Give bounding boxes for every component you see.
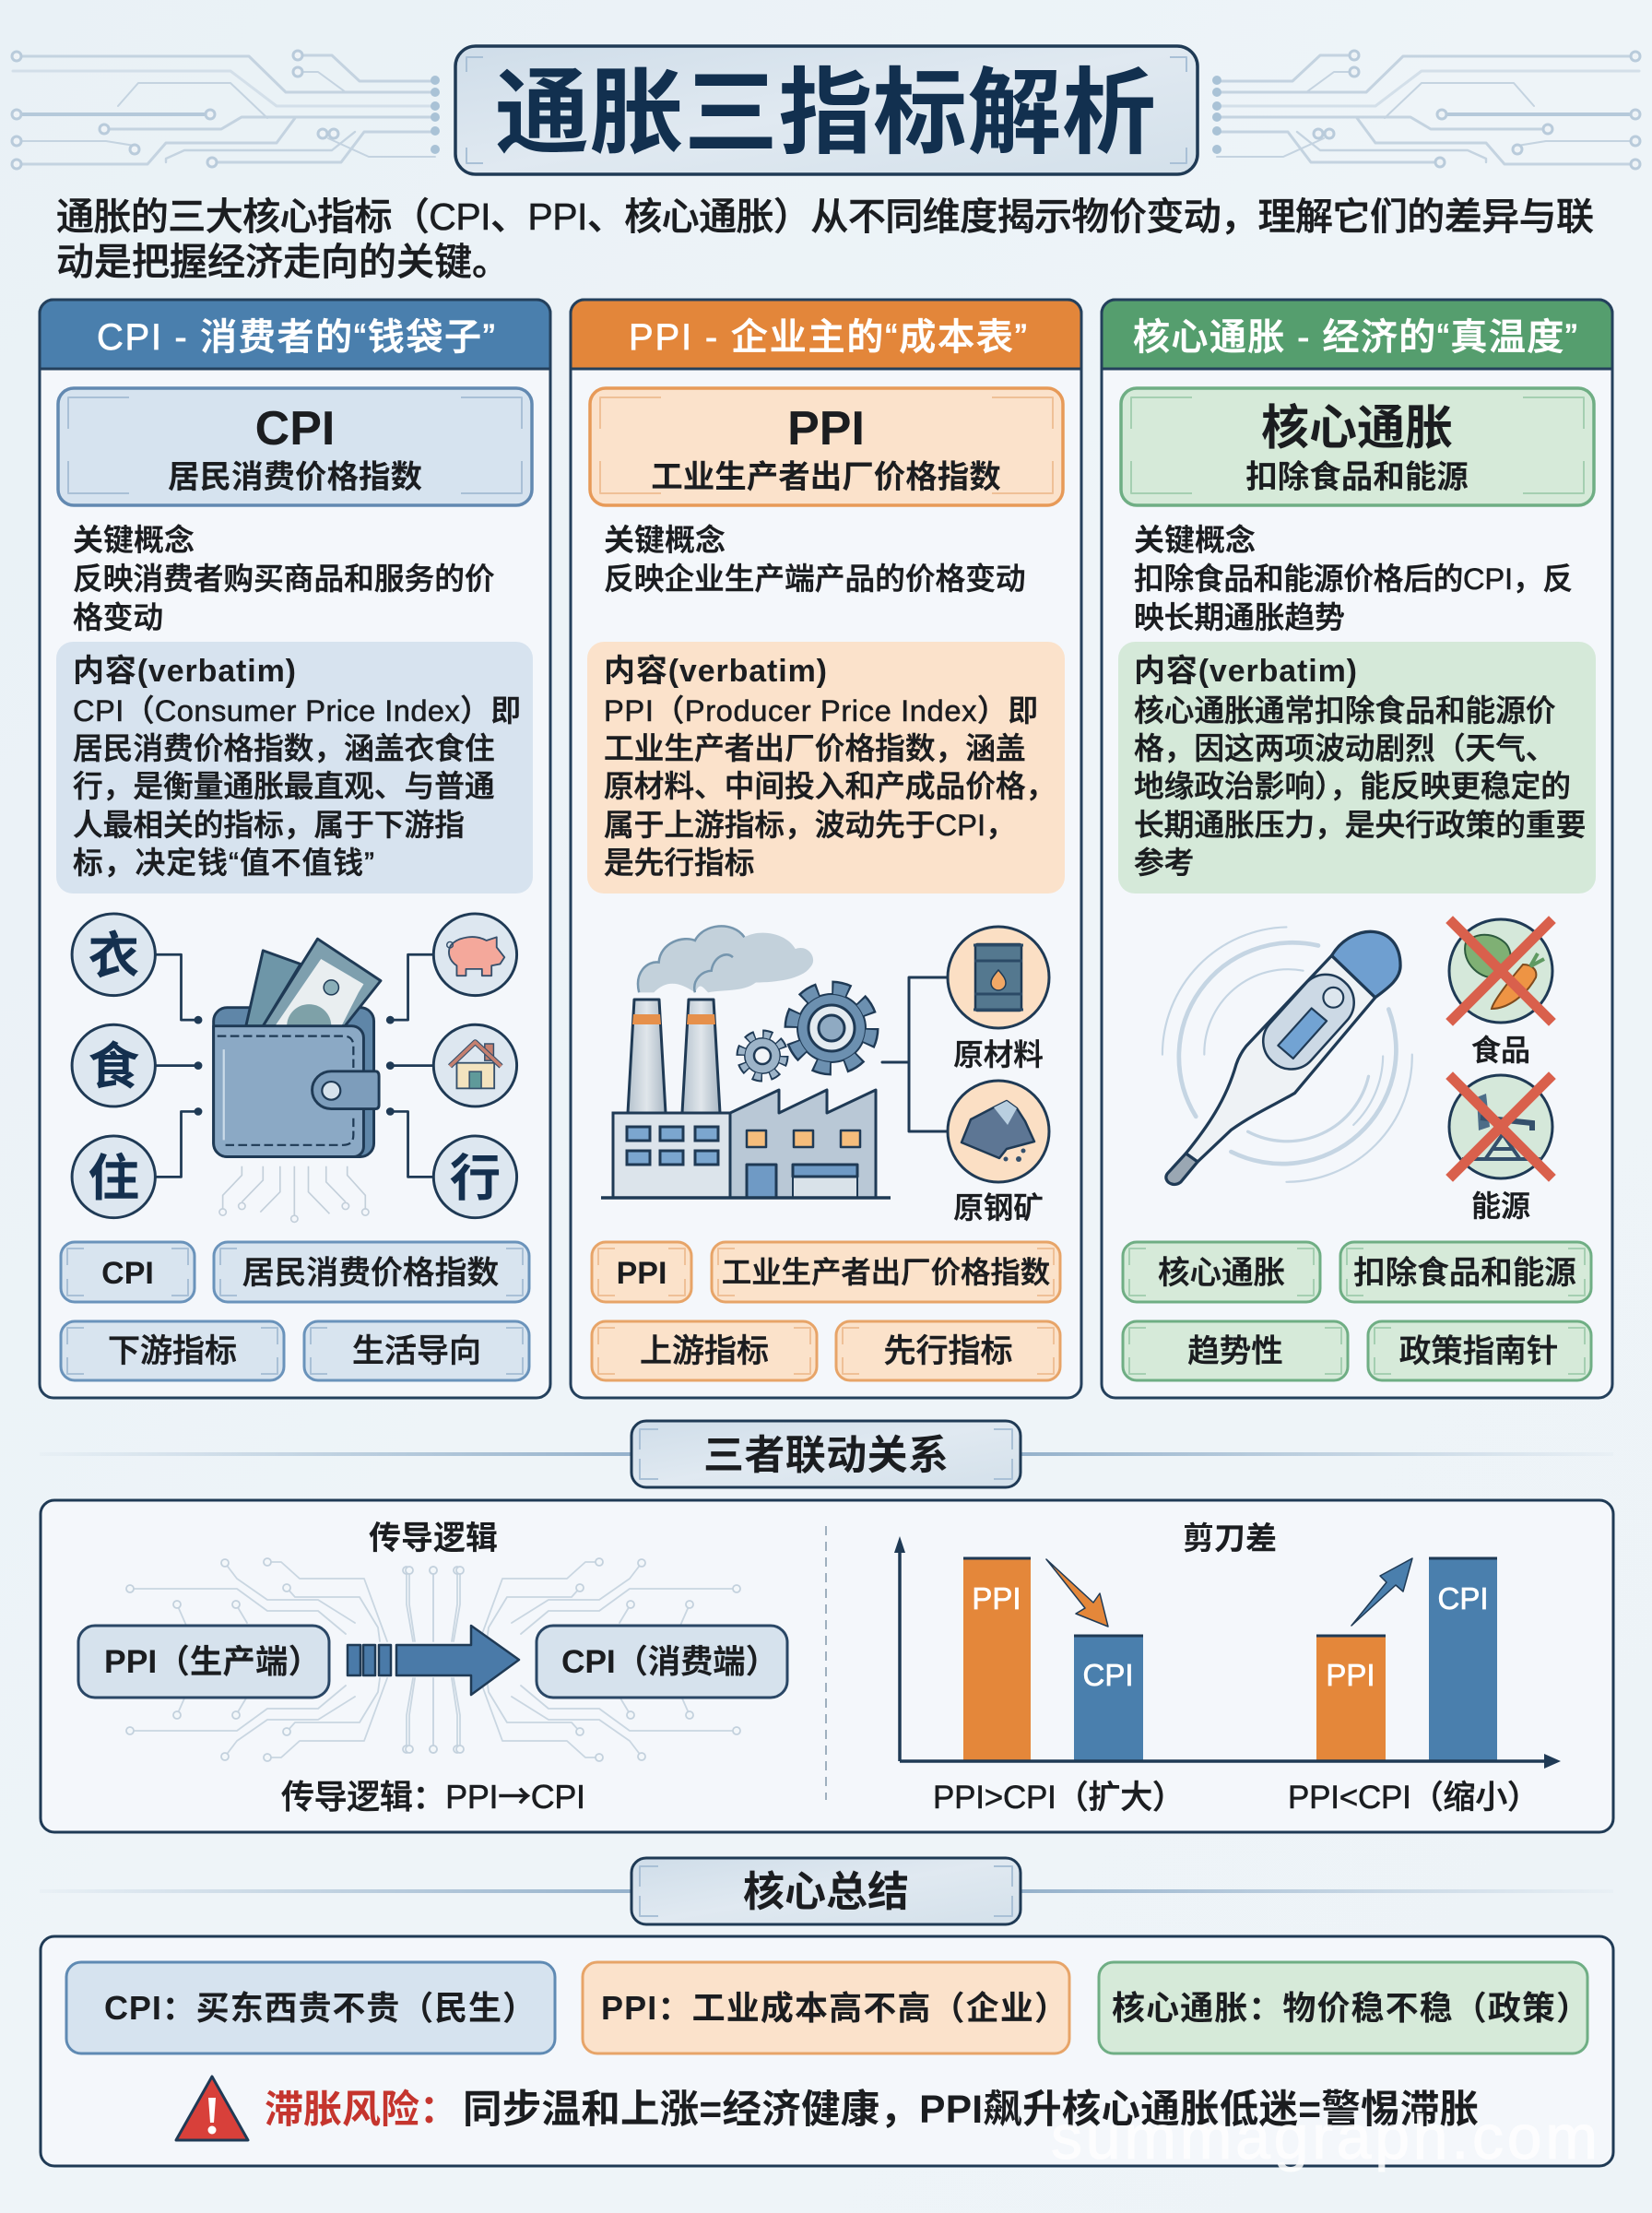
header: PPI: [571, 300, 1081, 369]
tags CPI: [61, 1242, 529, 1380]
CPI name box: [58, 388, 532, 505]
heading: summary: 核心总结: [743, 1868, 909, 1915]
panel: PPI: [571, 300, 1081, 1398]
icon: 行: [433, 1136, 517, 1218]
bar PPI low: PPI: [1326, 1658, 1375, 1692]
heading: summary: [40, 1858, 1613, 1924]
divider: [825, 1526, 827, 1800]
scissors heading: 剪刀差: [1183, 1521, 1277, 1556]
panel: CPI: [40, 300, 550, 1398]
content box core: [1118, 642, 1596, 893]
content box CPI: 内容(verbatim): [73, 654, 296, 689]
label shrink: PPI<CPI（缩小）: [1288, 1780, 1540, 1816]
icon: 衣: 衣: [88, 928, 139, 984]
scissors bar chart: [894, 1536, 1561, 1816]
arrow down: [1046, 1559, 1108, 1627]
heading: linkage: [40, 1421, 1613, 1487]
summary CPI: [66, 1962, 555, 2053]
tags CPI: 居民消费价格指数: [242, 1255, 499, 1291]
tags core: 核心通胀: [1158, 1256, 1285, 1291]
connector: [882, 977, 947, 1131]
key concept CPI: [73, 523, 495, 634]
content box core: 内容(verbatim): [1134, 654, 1357, 689]
content box CPI: CPI（Consumer Price Index）即: [73, 693, 521, 728]
intro text: 通胀的三大核心指标（CPI、PPI、核心通胀）从不同维度揭示物价变动，理解它们的差异与联: [56, 195, 1594, 238]
label expand: PPI>CPI（扩大）: [933, 1780, 1185, 1816]
ground line: [601, 1196, 891, 1200]
PPI name box: PPI: [787, 402, 865, 456]
PPI name box: [590, 388, 1063, 505]
summary core: 核心通胀：物价稳不稳（政策）: [1112, 1989, 1589, 2027]
header: CPI: CPI - 消费者的“钱袋子”: [97, 317, 495, 358]
icon: piggy bank: [433, 914, 517, 996]
icon: oil barrel: [948, 927, 1049, 1028]
CPI name box: 居民消费价格指数: [168, 460, 422, 495]
PPI box: PPI（生产端）: [104, 1643, 321, 1680]
summary CPI: CPI：买东西贵不贵（民生）: [104, 1989, 536, 2027]
workshop: [730, 1090, 876, 1198]
circuit traces lower: [126, 1678, 461, 1761]
transmission arrow: [348, 1626, 519, 1695]
panel: summary: [41, 1936, 1613, 2166]
thermometer illustration: [1162, 927, 1412, 1184]
content box CPI: 人最相关的指标，属于下游指: [73, 808, 465, 842]
factory illustration: [601, 926, 1049, 1225]
header: PPI: PPI - 企业主的“成本表”: [629, 317, 1027, 358]
tags PPI: PPI: [617, 1256, 667, 1291]
circuit traces: [126, 1558, 461, 1641]
content box PPI: 工业生产者出厂价格指数，涵盖: [604, 731, 1026, 765]
content box PPI: 原材料、中间投入和产成品价格，: [604, 769, 1056, 803]
intro text: [56, 195, 1594, 283]
icon: no energy: [1449, 1075, 1552, 1178]
header: CPI: [40, 300, 550, 369]
content box core: 地缘政治影响），能反映更稳定的: [1134, 769, 1571, 803]
icon: 行: 行: [450, 1150, 501, 1206]
summary PPI: [583, 1962, 1069, 2053]
transmission heading: 传导逻辑: [369, 1521, 498, 1556]
bar CPI high: CPI: [1437, 1581, 1489, 1615]
key concept CPI: 关键概念: [73, 523, 195, 557]
icon: 住: 住: [88, 1150, 139, 1206]
icon: 食: 食: [88, 1038, 139, 1095]
tags core: [1123, 1242, 1591, 1380]
bar CPI high: [1429, 1557, 1497, 1761]
tags CPI: 生活导向: [352, 1333, 481, 1369]
content box core: 参考: [1134, 846, 1194, 880]
key concept core: [1134, 523, 1573, 634]
icon: 住: [72, 1136, 155, 1218]
tags core: 政策指南针: [1399, 1334, 1558, 1369]
key concept PPI: [604, 523, 1026, 596]
icon: no food: [1449, 919, 1552, 1023]
core name box: 核心通胀: [1261, 402, 1453, 456]
circuit decoration right: [1212, 51, 1640, 169]
header: core inflation: 核心通胀 - 经济的“真温度”: [1133, 317, 1577, 358]
icon: wallet: [214, 939, 381, 1157]
stagflation text: 同步温和上涨=经济健康，PPI飙升核心通胀低迷=警惕滞胀: [463, 2089, 1479, 2132]
core name box: [1121, 388, 1594, 505]
summary core: [1099, 1962, 1589, 2053]
bar CPI low: [1074, 1635, 1143, 1761]
key concept core: 关键概念: [1134, 523, 1256, 557]
content box CPI: 标，决定钱“值不值钱”: [73, 846, 374, 880]
tags PPI: [592, 1242, 1060, 1380]
smoke: [638, 926, 813, 992]
label 原材料: 原材料: [953, 1038, 1044, 1071]
label 食品: 食品: [1471, 1034, 1530, 1067]
tags core: 扣除食品和能源: [1353, 1256, 1576, 1291]
core name box: 扣除食品和能源: [1245, 460, 1469, 495]
summary PPI: PPI：工业成本高不高（企业）: [601, 1989, 1068, 2027]
bar PPI high: [963, 1557, 1031, 1761]
watermark: summagraph.com: [1051, 2102, 1598, 2172]
content box PPI: 属于上游指标，波动先于CPI，: [604, 808, 1016, 842]
content box core: 核心通胀通常扣除食品和能源价: [1134, 693, 1556, 728]
content box CPI: [56, 642, 533, 893]
tags PPI: 先行指标: [883, 1333, 1013, 1369]
icon: ore rock: [948, 1081, 1049, 1182]
tags PPI: 上游指标: [640, 1333, 769, 1369]
transmission caption: 传导逻辑：PPI→CPI: [281, 1770, 585, 1818]
label 能源: 能源: [1471, 1189, 1530, 1223]
content box CPI: 行，是衡量通胀最直观、与普通: [73, 769, 495, 803]
key concept CPI: 反映消费者购买商品和服务的价: [73, 562, 495, 596]
CPI box: CPI（消费端）: [561, 1643, 778, 1680]
office block: [613, 1113, 730, 1198]
circuit traces under wallet: [219, 1166, 369, 1222]
tags PPI: 工业生产者出厂价格指数: [722, 1256, 1050, 1289]
rings: [1162, 927, 1412, 1182]
icon: 衣: [72, 914, 155, 996]
CPI box: [537, 1626, 787, 1698]
gears: [741, 988, 871, 1077]
key concept core: 映长期通胀趋势: [1134, 600, 1345, 634]
PPI box: [78, 1626, 329, 1698]
axes: [894, 1536, 1561, 1769]
icon: house: [433, 1024, 517, 1106]
key concept PPI: 反映企业生产端产品的价格变动: [604, 562, 1026, 596]
connectors: [156, 954, 433, 1177]
PPI name box: 工业生产者出厂价格指数: [651, 460, 1001, 495]
content box PPI: 是先行指标: [604, 846, 754, 880]
content box core: 格，因这两项波动剧烈（天气、: [1134, 731, 1556, 765]
bar PPI high: PPI: [972, 1581, 1021, 1615]
circuit traces lower mirrored: [406, 1678, 740, 1761]
panel: core inflation: [1102, 300, 1612, 1398]
content box PPI: PPI（Producer Price Index）即: [604, 693, 1038, 728]
CPI name box: CPI: [255, 402, 335, 456]
circuit traces mirrored: [406, 1558, 740, 1641]
circuit decoration left: [12, 51, 440, 169]
header: core inflation: [1102, 300, 1612, 369]
chimneys: [628, 1000, 720, 1113]
content box PPI: [587, 642, 1065, 893]
content box core: 长期通胀压力，是央行政策的重要: [1134, 808, 1586, 842]
panel: linkage: [41, 1500, 1613, 1832]
arrow up: [1351, 1558, 1412, 1626]
tags CPI: CPI: [101, 1256, 154, 1291]
icon: 食: [72, 1024, 155, 1106]
wallet illustration: [72, 914, 517, 1222]
key concept core: 扣除食品和能源价格后的CPI，反: [1134, 562, 1573, 596]
heading: linkage: 三者联动关系: [703, 1433, 949, 1478]
content box PPI: 内容(verbatim): [604, 654, 827, 689]
bar PPI low: [1316, 1635, 1386, 1761]
stagflation label: 滞胀风险：: [265, 2088, 458, 2131]
title: 通胀三指标解析: [495, 61, 1156, 166]
intro text: 动是把握经济走向的关键。: [56, 241, 510, 283]
key concept PPI: 关键概念: [604, 523, 726, 557]
content box CPI: 居民消费价格指数，涵盖衣食住: [73, 731, 495, 765]
tags core: 趋势性: [1187, 1334, 1283, 1369]
tags CPI: 下游指标: [108, 1333, 237, 1369]
icon: warning: [176, 2077, 248, 2140]
label 原钢矿: 原钢矿: [953, 1191, 1044, 1225]
thermometer body: [1166, 931, 1400, 1184]
key concept CPI: 格变动: [73, 600, 163, 634]
bar CPI low: CPI: [1082, 1658, 1134, 1692]
